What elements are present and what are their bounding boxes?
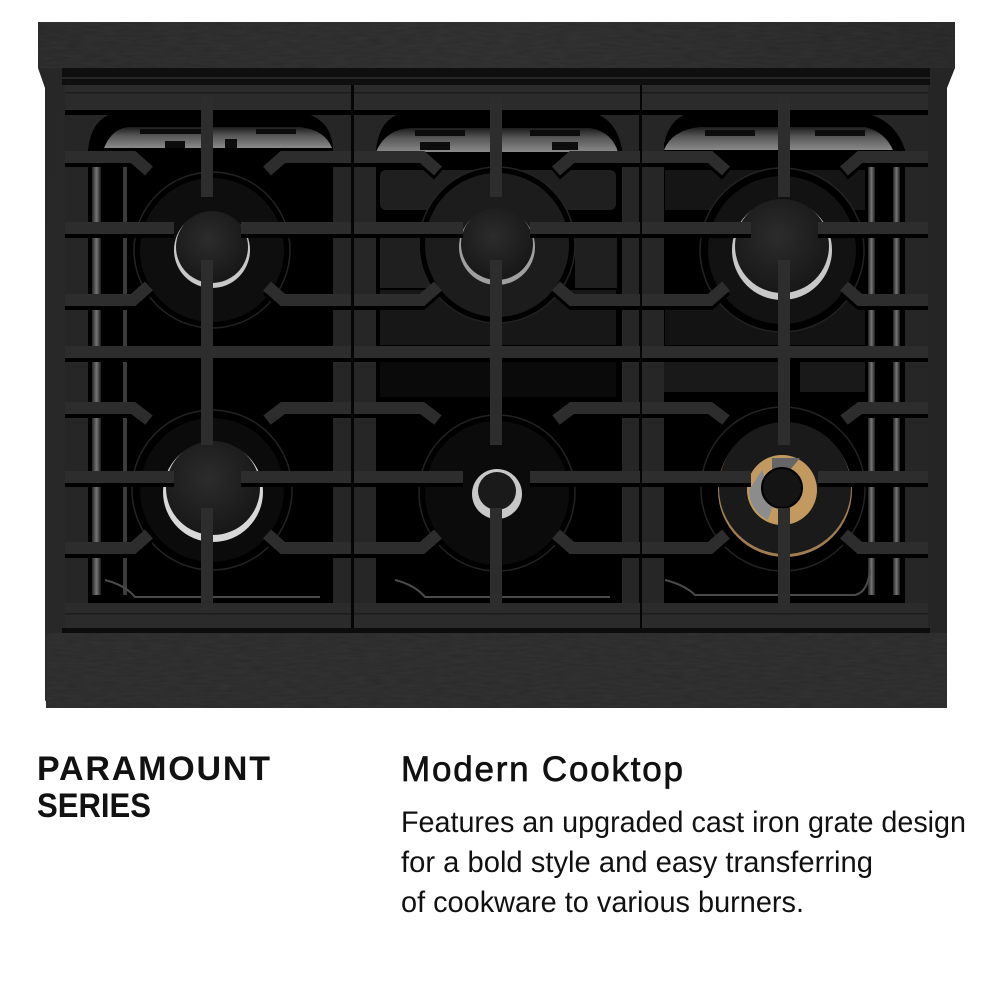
burner 1 [134,172,290,328]
burner 5 [419,415,575,571]
heading: series name: PARAMOUNT [37,750,270,788]
burner 2 [419,167,575,323]
burner 3 [700,168,864,332]
back shadow line [62,68,930,85]
feature description: for a bold style and easy transferring [401,846,873,879]
back panel texture [38,22,955,68]
pan reflections: back edge [104,127,893,152]
grate right [642,85,928,628]
feature description: of cookware to various burners. [401,886,804,919]
heading: series name: SERIES [37,787,151,825]
feature description [401,806,966,919]
heading: feature title: Modern Cooktop [401,750,683,789]
front pan edge lines [105,570,870,597]
front panel texture [46,633,947,708]
heading: series name [37,750,270,825]
burner 4 [132,410,292,570]
side chrome rails [92,165,900,595]
front panel [46,633,947,708]
burner 6: brass [701,407,865,571]
wells [65,85,927,628]
grate center [354,85,640,628]
back panel [38,22,955,708]
enamel reflection blocks [380,170,865,397]
grate side rails [68,112,926,607]
feature description: Features an upgraded cast iron grate design [401,806,966,839]
cooktop photo [38,22,955,708]
grate left [65,85,351,628]
